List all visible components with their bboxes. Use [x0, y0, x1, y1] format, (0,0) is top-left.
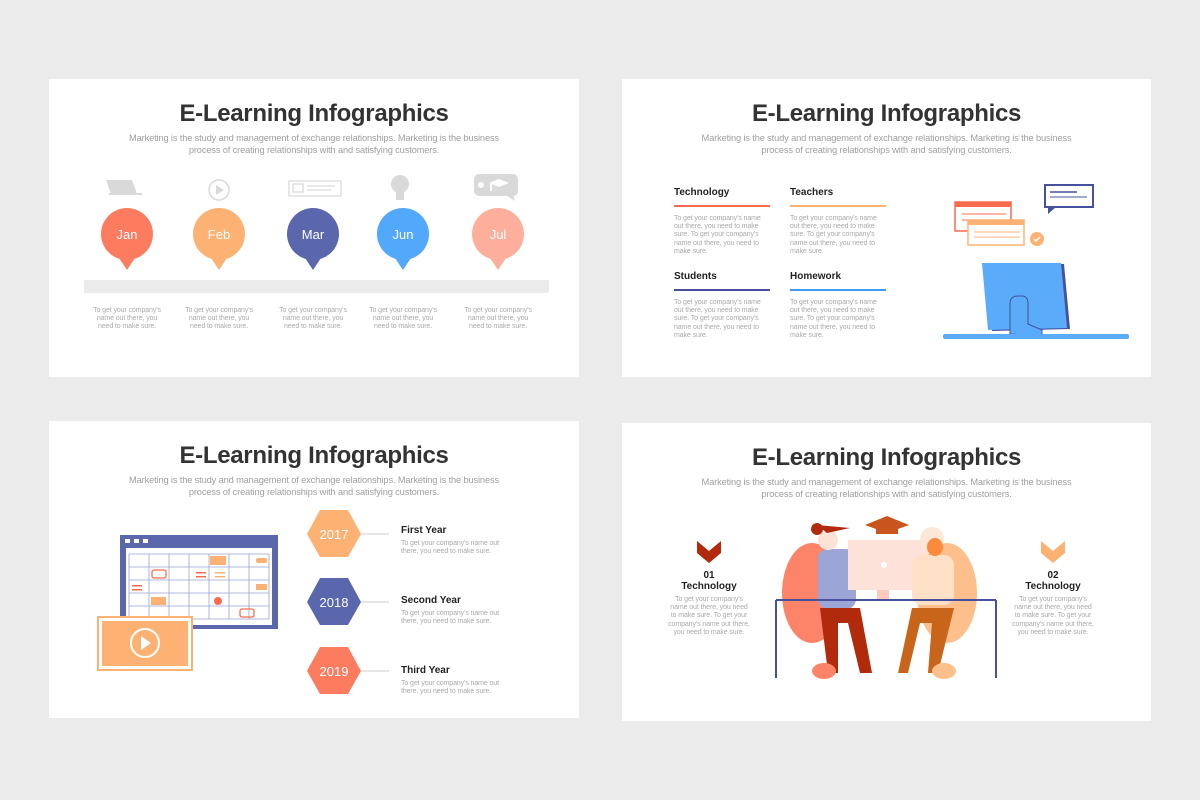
block: Students [674, 271, 770, 339]
icon: chevron orange [1041, 541, 1065, 563]
pin: Jun [377, 208, 429, 270]
pin: Feb: Feb [208, 227, 230, 242]
bar [84, 280, 549, 293]
block: Teachers: To get your company's name out there, you need to make sure. To get your company's name out there, you need to make sure. [790, 215, 877, 255]
text: Third Year: Third Year [401, 665, 450, 676]
text: First Year [401, 525, 499, 555]
illustration: two people at computer [775, 516, 997, 679]
left block: Technology [681, 581, 737, 592]
block: Homework: Homework [790, 271, 841, 282]
panel: people [622, 423, 1151, 721]
block: Technology: To get your company's name out there, you need to make sure. To get your company's name out there, you need to make sure. [674, 215, 761, 255]
pin: Jan [101, 208, 153, 270]
pin: Feb [193, 208, 245, 270]
text: Third Year: To get your company's name out there, you need to make sure. [401, 680, 499, 695]
right block [1012, 541, 1094, 636]
hexagon: 2017 [307, 510, 389, 557]
pin: Jun: Jun [393, 227, 413, 242]
window red [955, 202, 1011, 231]
text: First Year: First Year [401, 525, 446, 536]
subtitle [702, 477, 1072, 499]
text: Jan: To get your company's name out there, you need to make sure. [93, 307, 161, 330]
subtitle: process of creating relationships with and satisfying customers. [761, 145, 1012, 155]
window orange [968, 220, 1024, 245]
subtitle: process of creating relationships with and satisfying customers. [189, 487, 439, 497]
text: Mar: To get your company's name out there, you need to make sure. [279, 307, 347, 330]
illustration: computer with chat [943, 184, 1129, 339]
pin: Jan: Jan [117, 227, 137, 242]
subtitle [129, 475, 499, 497]
pin: Jul: Jul [490, 227, 506, 242]
title: E-Learning Infographics [179, 100, 449, 127]
subtitle [129, 133, 499, 155]
right block: Technology [1025, 581, 1081, 592]
subtitle: Marketing is the study and management of exchange relationships. Marketing is the business [702, 133, 1071, 143]
block: Teachers [790, 187, 886, 255]
text: Feb: To get your company's name out there, you need to make sure. [185, 307, 253, 330]
check circle [1030, 232, 1044, 246]
icon: chevron red [697, 541, 721, 563]
timeline graphic [84, 174, 549, 293]
block: Students: To get your company's name out there, you need to make sure. To get your company's name out there, you need to make sure. [674, 299, 761, 339]
text: Second Year: To get your company's name out there, you need to make sure. [401, 610, 499, 625]
text: First Year: To get your company's name out there, you need to make sure. [401, 540, 499, 555]
pin: Mar: Mar [302, 227, 325, 242]
block: Homework [790, 271, 886, 339]
hexagon: 2019 [307, 647, 389, 694]
icon: bulb [391, 175, 409, 200]
pin: Mar [287, 208, 339, 270]
block: Technology [674, 187, 770, 255]
left block [668, 541, 750, 636]
title: E-Learning Infographics [752, 100, 1021, 127]
left block: To get your company's name out there, you need to make sure. To get your company's name out there, you need to make sure. [668, 596, 750, 636]
hexagon: 2018: 2018 [320, 595, 348, 610]
monitor [943, 263, 1129, 339]
subtitle: Marketing is the study and management of exchange relationships. Marketing is the business [702, 477, 1071, 487]
text: Second Year [401, 595, 499, 625]
illustration: calendar and video [97, 535, 278, 671]
text: Jun: To get your company's name out there, you need to make sure. [369, 307, 437, 330]
text: Jul: To get your company's name out there, you need to make sure. [464, 307, 532, 330]
text: Second Year: Second Year [401, 595, 461, 606]
block: Homework: To get your company's name out there, you need to make sure. To get your company's name out there, you need to make sure. [790, 299, 877, 339]
panel: categories [622, 79, 1151, 377]
subtitle [702, 133, 1072, 155]
panel: timeline [49, 79, 579, 377]
left block: 01 [703, 570, 715, 581]
block: Teachers: Teachers [790, 187, 833, 198]
text: Third Year [401, 665, 499, 695]
block: Technology: Technology [674, 187, 729, 198]
chat bubble [1045, 185, 1093, 214]
subtitle: Marketing is the study and management of exchange relationships. Marketing is the business [129, 475, 499, 485]
hexagon: 2018 [307, 578, 389, 625]
icon: email [289, 181, 341, 196]
icon: laptop [106, 180, 142, 195]
right block: To get your company's name out there, you need to make sure. To get your company's name out there, you need to make sure. [1012, 596, 1094, 636]
title: E-Learning Infographics [179, 442, 449, 469]
subtitle: Marketing is the study and management of exchange relationships. Marketing is the business [129, 133, 499, 143]
block: Students: Students [674, 271, 717, 282]
subtitle: process of creating relationships with and satisfying customers. [189, 145, 439, 155]
icon: play [209, 180, 229, 200]
pin: Jul [472, 208, 524, 270]
hexagon: 2019: 2019 [320, 664, 348, 679]
panel: years [49, 421, 579, 718]
right block: 02 [1047, 570, 1059, 581]
icon: graduation bubble [474, 174, 518, 201]
hexagon: 2017: 2017 [320, 527, 348, 542]
title: E-Learning Infographics [752, 444, 1021, 471]
subtitle: process of creating relationships with and satisfying customers. [761, 489, 1012, 499]
